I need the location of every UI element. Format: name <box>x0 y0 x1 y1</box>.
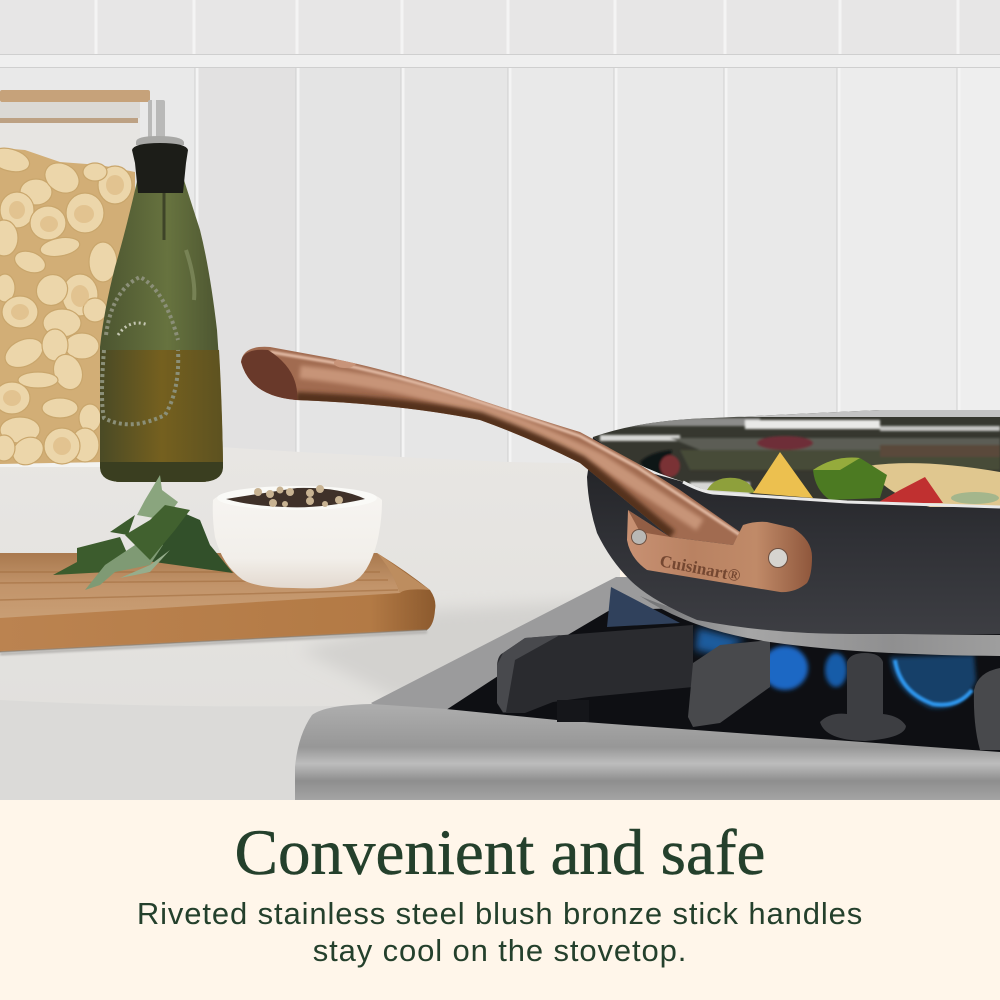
gas stove <box>295 577 1000 800</box>
body text: Riveted stainless steel blush bronze stick handles <box>137 896 863 931</box>
body text: stay cool on the stovetop. <box>313 933 687 968</box>
burner grates <box>497 587 1000 750</box>
pan body <box>587 437 1000 634</box>
caption panel <box>0 800 1000 1000</box>
heading: Convenient and safe <box>235 817 765 889</box>
riveted handle plate with logo: Cuisinart® <box>658 551 742 586</box>
stainless front lip <box>295 704 1000 800</box>
body text <box>137 896 863 968</box>
cutting board <box>0 553 435 654</box>
blue flames <box>695 628 976 708</box>
copper stick handle <box>235 340 755 550</box>
riveted handle plate with logo <box>627 510 812 592</box>
countertop <box>0 447 620 800</box>
white bowl of peppercorns <box>213 485 382 588</box>
food in the pan <box>707 452 1000 507</box>
glass jar of orecchiette pasta <box>0 90 150 470</box>
rim and interior <box>593 410 1000 502</box>
pan base steel band <box>640 596 1000 656</box>
white front rim line <box>683 482 1000 507</box>
photo: pan on a gas stove in a kitchen <box>0 0 1000 800</box>
olive oil bottle <box>100 100 223 482</box>
frying pan <box>235 340 1000 656</box>
parsley sprig <box>53 475 233 590</box>
tiled wall <box>0 0 1000 480</box>
